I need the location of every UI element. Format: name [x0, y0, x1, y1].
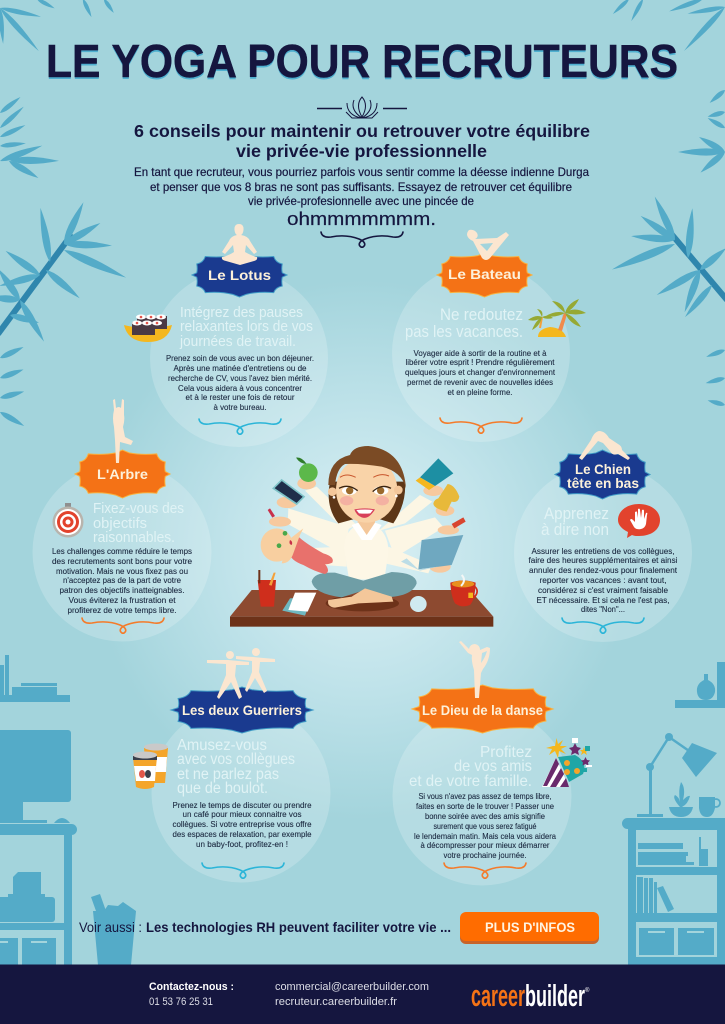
bamboo leaves top left — [0, 0, 115, 53]
heading: à dire non — [541, 520, 609, 539]
body text: ET nécessaire. Et si cela ne l'est pas, — [536, 595, 670, 605]
body text: profiterez de votre temps libre. — [68, 605, 176, 615]
panel: Le Bateau — [392, 230, 586, 442]
body text — [528, 546, 678, 614]
papers — [282, 593, 316, 616]
flourish under intro — [321, 232, 403, 247]
heading: Amusez-vous — [177, 737, 267, 754]
game controller — [433, 484, 459, 512]
body text: annuler des rendez-vous pour finalement — [529, 565, 678, 575]
body text — [172, 800, 312, 849]
heading: Ne redoutez — [440, 305, 523, 324]
body text: patron des objectifs inatteignables. — [60, 585, 184, 595]
furniture silhouette right — [622, 662, 725, 965]
logo: careerbuilder: career — [471, 978, 525, 1013]
pose: boat — [467, 230, 509, 260]
body text: permet de revenir avec de nouvelles idées — [407, 377, 554, 387]
body text: à décompresser pour mieux démarrer — [420, 840, 550, 850]
see also text: Voir aussi : — [79, 919, 142, 935]
pose: tree — [113, 399, 133, 463]
intro text: vie privée-profesionnelle avec une pincée de — [248, 194, 474, 208]
bamboo leaves mid right — [678, 88, 725, 175]
bamboo leaves top right — [612, 0, 725, 53]
contact details — [149, 981, 429, 1008]
badge — [555, 450, 650, 499]
furniture silhouette left — [0, 655, 77, 965]
central illustration: multitasking woman — [230, 446, 493, 627]
badge label: Le Dieu de la danse — [422, 702, 543, 718]
button: plus d'infos: PLUS D'INFOS — [485, 920, 575, 935]
hands — [269, 477, 459, 573]
body text: faites en sorte de le trouver ! Passer une — [416, 801, 554, 811]
title: LE YOGA POUR RECRUTEURS — [46, 37, 678, 89]
subtitle: 6 conseils pour maintenir ou retrouver votre équilibre — [134, 121, 590, 141]
body text: des espaces de relaxation, par exemple — [172, 829, 312, 839]
panel: Le Dieu de la danse — [392, 641, 592, 886]
heading: journées de travail. — [179, 333, 296, 350]
bamboo branch right — [610, 195, 725, 407]
flourish — [440, 418, 522, 433]
subtitle: vie privée-vie professionnelle — [236, 141, 487, 161]
body text: un baby-foot, profitez-en ! — [196, 839, 288, 849]
badge — [412, 685, 553, 733]
body text — [405, 348, 556, 397]
body text: des recrutements sont bons pour votre — [52, 556, 192, 566]
waste bin silhouette — [91, 894, 136, 965]
contact details: Contactez-nous : — [149, 981, 234, 993]
lipstick — [268, 508, 275, 518]
body text — [166, 353, 314, 412]
subtitle — [134, 121, 590, 161]
see also text: Les technologies RH peuvent faciliter votre vie ... — [146, 919, 451, 935]
panel: Le Lotus — [124, 224, 328, 447]
body text: un café pour mieux connaitre vos — [182, 809, 302, 819]
laptop — [401, 535, 463, 571]
body text: Cela vous aidera à vous concentrer — [178, 383, 302, 393]
footer band — [0, 964, 725, 1024]
body text: collègues. Si votre entreprise vous offre — [172, 819, 312, 829]
intro text — [134, 165, 589, 229]
heading: Intégrez des pauses — [180, 304, 303, 321]
heading: que de boulot. — [177, 780, 268, 797]
badge — [437, 253, 532, 297]
badge label: Le Chien — [575, 461, 631, 477]
heading: relaxantes lors de vos — [180, 318, 313, 335]
icon: stop speech bubble — [618, 504, 660, 538]
heading: pas les vacances. — [405, 322, 523, 341]
badge — [75, 450, 170, 498]
body text: surement que vous serez fatigué — [434, 821, 537, 831]
body text: recherche de CV, vous l'avez bien mérité. — [168, 373, 312, 383]
badge — [192, 253, 287, 297]
panel: Le Chien tête en bas — [514, 431, 692, 642]
pose: downward dog — [579, 431, 630, 460]
body text: dites "Non"... — [581, 604, 625, 614]
heading: objectifs — [93, 515, 147, 532]
icon: sushi plate — [124, 314, 172, 342]
panel: L'Arbre — [32, 399, 212, 642]
badge label: L'Arbre — [97, 466, 148, 482]
body text: et en pleine forme. — [448, 387, 512, 397]
desk — [230, 590, 493, 627]
intro text: et penser que vos 8 bras ne sont pas suffisants. Essayez de retrouver cet équilibre — [150, 180, 572, 194]
body text: Les challenges comme réduire le temps — [52, 546, 193, 556]
contact details: 01 53 76 25 31 — [149, 996, 213, 1008]
badge — [171, 687, 313, 733]
woman — [288, 446, 444, 608]
usb stick — [452, 517, 466, 528]
icon: party popper — [542, 738, 592, 787]
book — [416, 458, 453, 490]
body text: n'acceptez pas de la part de votre — [63, 575, 181, 585]
pose: dancer — [459, 641, 490, 698]
heading: et ne parlez pas — [177, 766, 279, 783]
body text: Prenez le temps de discuter ou prendre — [172, 800, 312, 810]
pen cup — [258, 570, 276, 607]
panel: Les deux Guerriers — [133, 648, 330, 882]
flourish — [199, 419, 281, 434]
heading: avec vos collègues — [177, 751, 295, 768]
mouse — [410, 596, 427, 612]
badge label — [567, 461, 639, 491]
pose: lotus — [222, 224, 257, 265]
heading: de vos amis — [454, 758, 532, 775]
body text: Voyager aide à sortir de la routine et à — [414, 348, 547, 358]
flourish — [444, 863, 526, 878]
baby — [261, 528, 333, 574]
body text — [414, 791, 556, 860]
heading — [93, 500, 184, 546]
heading: raisonnables. — [93, 529, 175, 546]
intro text: En tant que recruteur, vous pourriez parfois vous sentir comme la déesse indienne Durga — [134, 165, 589, 179]
body text: Prenez soin de vous avec un bon déjeuner. — [166, 353, 314, 363]
badge label: tête en bas — [567, 475, 639, 491]
contact details: commercial@careerbuilder.com — [275, 981, 429, 993]
flourish — [82, 618, 164, 633]
icon: palm island — [528, 299, 586, 337]
body text: Après une matinée d'entretiens ou de — [174, 363, 307, 373]
body text: à votre bureau. — [214, 402, 266, 412]
logo: careerbuilder: builder — [525, 978, 585, 1013]
icon: lotus divider — [317, 97, 407, 118]
body text: et à le rester une fois de retour — [186, 392, 295, 402]
heading — [179, 304, 313, 350]
tea mug — [450, 575, 477, 606]
heading: Fixez-vous des — [93, 500, 184, 517]
bamboo leaves mid left — [0, 95, 59, 181]
body text: bonne soirée avec des amis signifie — [425, 811, 545, 821]
logo: careerbuilder: ® — [585, 987, 590, 994]
apple — [296, 458, 318, 482]
heading — [405, 305, 523, 341]
body text: le lendemain matin. Mais cela vous aidera — [414, 831, 556, 841]
body text: Si vous n'avez pas assez de temps libre, — [418, 791, 552, 801]
badge label: Le Bateau — [448, 266, 521, 282]
heading: Profitez — [480, 744, 532, 761]
body text: Vous éviterez la frustration et — [68, 595, 176, 605]
body text: quelques jours et changer d'environnement — [405, 367, 556, 377]
flourish — [562, 618, 644, 633]
phone — [273, 480, 304, 504]
pose: two warriors — [207, 648, 275, 699]
heading: et de votre famille. — [409, 773, 532, 790]
heading: Apprenez — [544, 504, 609, 523]
heading — [177, 737, 295, 797]
intro text: ohmmmmmmm. — [287, 209, 436, 229]
body text: votre prochaine journée. — [444, 850, 526, 860]
body text: reporter vos vacances : avant tout, — [540, 575, 666, 585]
body text: faire des heures supplémentaires et ainsi — [528, 555, 678, 565]
body text: libérer votre esprit ! Prendre régulièrement — [406, 357, 555, 367]
body text: considérez si c'est vraiment faisable — [538, 585, 668, 595]
body text: motivation. Mais ne vous fixez pas ou — [56, 566, 188, 576]
icon: coffee cups — [133, 744, 168, 789]
button: plus d'infos — [460, 912, 599, 944]
heading — [541, 504, 609, 539]
bamboo branch left — [0, 201, 128, 428]
badge label: Les deux Guerriers — [182, 702, 302, 718]
flourish — [202, 863, 284, 878]
contact details: recruteur.careerbuilder.fr — [275, 996, 397, 1008]
body text — [52, 546, 193, 615]
icon: target stopwatch — [52, 503, 84, 538]
heading — [409, 744, 532, 790]
body text: Assurer les entretiens de vos collègues, — [532, 546, 674, 556]
badge label: Le Lotus — [208, 267, 271, 283]
title: LE YOGA POUR RECRUTEURS — [46, 35, 678, 87]
